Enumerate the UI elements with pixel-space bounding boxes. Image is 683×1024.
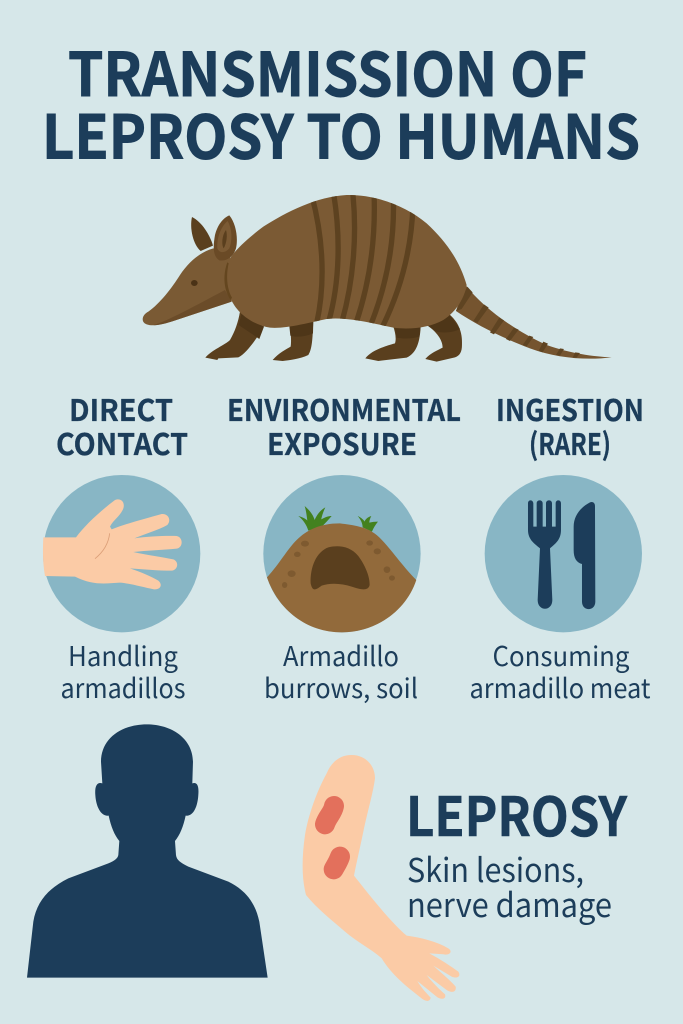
fork — [528, 500, 561, 609]
title: TRANSMISSION OF — [68, 27, 587, 114]
caption: handling armadillos: Handling — [68, 635, 178, 674]
heading: environmental exposure: EXPOSURE — [267, 420, 417, 464]
heading: environmental exposure — [227, 386, 461, 464]
burrow opening — [311, 546, 370, 589]
knife — [574, 502, 595, 609]
arm with lesions — [303, 755, 459, 1001]
icon: fork and knife in circle — [485, 475, 642, 632]
leprosy label: Skin lesions, — [407, 844, 584, 892]
caption: armadillo burrows, soil: burrows, soil — [264, 667, 418, 706]
caption: handling armadillos — [60, 635, 186, 706]
leprosy label: LEPROSY — [406, 773, 628, 852]
armadillo legs — [205, 312, 462, 362]
heading: ingestion (rare): INGESTION — [496, 386, 644, 430]
caption: armadillo burrows, soil — [264, 635, 418, 706]
caption: handling armadillos: armadillos — [60, 667, 186, 706]
armadillo near ear — [214, 215, 237, 261]
title — [42, 27, 640, 176]
lesions — [325, 806, 340, 869]
heading: ingestion (rare): (RARE) — [529, 420, 611, 464]
armadillo eye — [191, 280, 198, 286]
icon: hand in circle — [43, 475, 200, 632]
caption: consuming armadillo meat: Consuming — [492, 635, 630, 674]
armadillo illustration — [143, 192, 612, 362]
icon: burrow in circle — [263, 475, 421, 632]
caption: consuming armadillo meat: armadillo meat — [470, 667, 650, 706]
heading: environmental exposure: ENVIRONMENTAL — [227, 386, 461, 430]
armadillo tail — [456, 284, 612, 359]
caption: consuming armadillo meat — [470, 635, 650, 706]
armadillo shell bands — [312, 192, 413, 328]
leprosy label — [406, 773, 628, 927]
armadillo far ear — [191, 217, 213, 251]
human silhouette — [27, 724, 268, 978]
title: LEPROSY TO HUMANS — [42, 90, 640, 176]
heading: direct contact: CONTACT — [56, 420, 188, 464]
mound — [267, 523, 416, 632]
armadillo body shell — [226, 195, 467, 329]
grass — [298, 506, 378, 532]
heading: direct contact — [56, 386, 188, 464]
caption: armadillo burrows, soil: Armadillo — [283, 635, 399, 674]
leprosy label: nerve damage — [407, 879, 612, 927]
heading: ingestion (rare) — [496, 386, 644, 464]
armadillo head — [143, 248, 232, 325]
heading: direct contact: DIRECT — [69, 386, 173, 430]
